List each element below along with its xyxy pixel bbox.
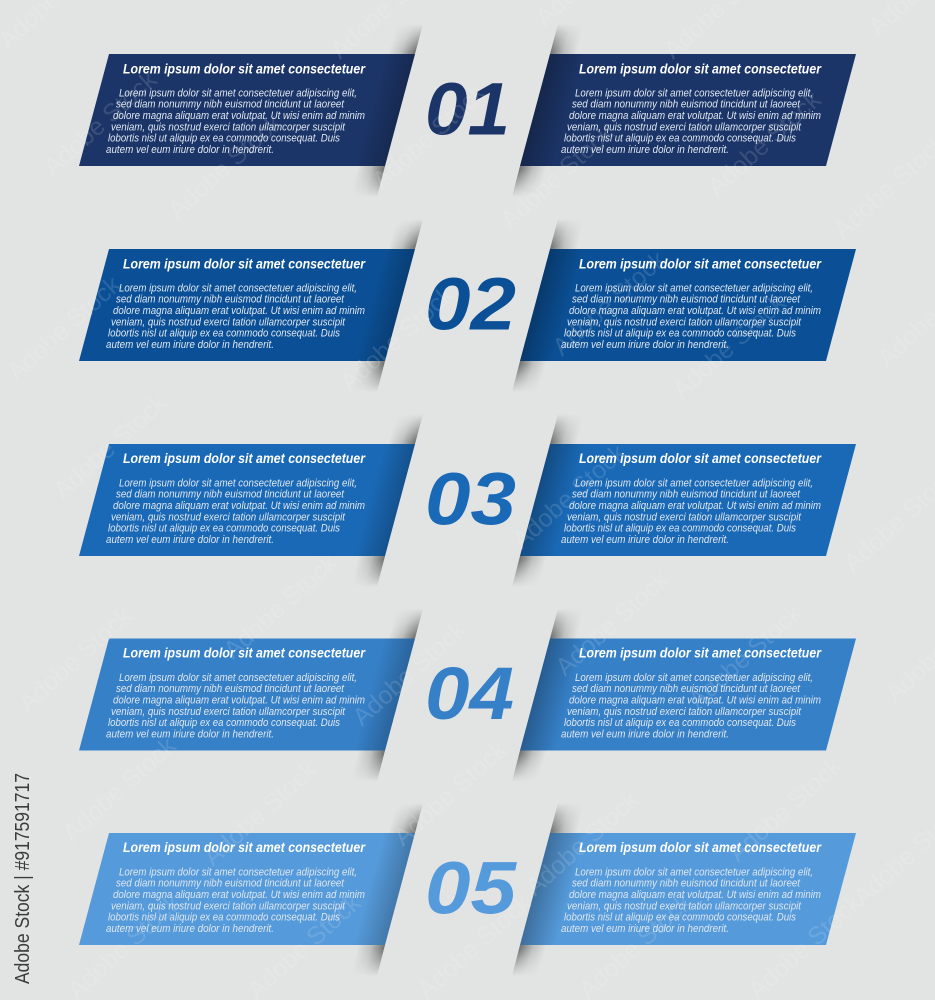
watermark layer: Adobe Stock: [163, 108, 288, 224]
right panel 04: autem vel eum iriure dolor in hendrerit.: [561, 728, 729, 740]
left panel 05: veniam, quis nostrud exerci tation ullamcorper suscipit: [111, 900, 346, 912]
right panel 02: autem vel eum iriure dolor in hendrerit.: [561, 339, 729, 351]
watermark layer: Adobe Stock: [347, 615, 472, 731]
right panel 05: Lorem ipsum dolor sit amet consectetuer adipiscing elit,: [575, 866, 813, 878]
row 04: [79, 608, 856, 782]
right panel 04: Lorem ipsum dolor sit amet consectetuer: [579, 644, 822, 660]
stock id side label: Adobe Stock | #917591717: [12, 773, 34, 984]
watermark layer: Adobe Stock: [520, 785, 645, 901]
watermark layer: Adobe Stock: [198, 755, 323, 871]
left panel 04: autem vel eum iriure dolor in hendrerit.: [106, 728, 274, 740]
left panel 03: Lorem ipsum dolor sit amet consectetuer: [123, 450, 366, 466]
right panel 03: [512, 414, 856, 587]
right panel 01: lobortis nisl ut aliquip ex ea commodo consequat. Duis: [564, 132, 796, 144]
left panel 01: Lorem ipsum dolor sit amet consectetuer adipiscing elit,: [119, 88, 357, 100]
watermark layer: Adobe Stock: [2, 270, 127, 386]
number 02: 02: [425, 262, 516, 346]
left panel 03: dolore magna aliquam erat volutpat. Ut wisi enim ad minim: [113, 500, 365, 512]
left panel 04: sed diam nonummy nibh euismod tincidunt ut laoreet: [116, 683, 345, 695]
left panel 01: Lorem ipsum dolor sit amet consectetuer: [123, 60, 366, 76]
row 02: [79, 219, 856, 392]
right panel 02: [512, 219, 856, 392]
row 01: [79, 24, 856, 197]
watermark layer: Adobe Stock: [550, 565, 675, 681]
right panel 02: veniam, quis nostrud exerci tation ullamcorper suscipit: [567, 316, 802, 328]
right panel 02: Lorem ipsum dolor sit amet consectetuer: [579, 256, 822, 272]
watermark layer: Adobe Stock: [38, 65, 163, 181]
left panel 02: lobortis nisl ut aliquip ex ea commodo consequat. Duis: [108, 328, 340, 340]
right panel 02: dolore magna aliquam erat volutpat. Ut wisi enim ad minim: [569, 305, 821, 317]
left panel 05: Lorem ipsum dolor sit amet consectetuer adipiscing elit,: [119, 866, 357, 878]
number 03: 03: [425, 458, 516, 540]
right panel 04: [512, 608, 856, 782]
left panel 04: lobortis nisl ut aliquip ex ea commodo consequat. Duis: [108, 717, 340, 729]
left panel 04: veniam, quis nostrud exerci tation ullamcorper suscipit: [111, 706, 346, 718]
left panel 03: autem vel eum iriure dolor in hendrerit.: [106, 534, 274, 546]
number 05: 05: [425, 846, 518, 930]
left panel 03: Lorem ipsum dolor sit amet consectetuer adipiscing elit,: [119, 478, 357, 490]
right panel 01: veniam, quis nostrud exerci tation ullamcorper suscipit: [567, 122, 802, 134]
right panel 05: Lorem ipsum dolor sit amet consectetuer: [579, 839, 822, 855]
left panel 04: dolore magna aliquam erat volutpat. Ut wisi enim ad minim: [113, 694, 365, 706]
right panel 04: sed diam nonummy nibh euismod tincidunt ut laoreet: [572, 683, 801, 695]
right panel 05: [512, 803, 856, 976]
watermark layer: Adobe Stock: [667, 288, 792, 404]
watermark layer: Adobe Stock: [218, 548, 343, 664]
left panel 01: lobortis nisl ut aliquip ex ea commodo consequat. Duis: [108, 132, 340, 144]
watermark layer: Adobe Stock: [13, 601, 138, 717]
left panel 02: Lorem ipsum dolor sit amet consectetuer adipiscing elit,: [119, 282, 357, 294]
watermark layer: Adobe Stock: [367, 78, 492, 194]
left panel 05: [79, 803, 423, 976]
right panel 05: lobortis nisl ut aliquip ex ea commodo consequat. Duis: [564, 912, 796, 924]
right panel 03: veniam, quis nostrud exerci tation ullamcorper suscipit: [567, 512, 802, 524]
left panel 05: sed diam nonummy nibh euismod tincidunt ut laoreet: [116, 878, 345, 890]
right panel 03: Lorem ipsum dolor sit amet consectetuer adipiscing elit,: [575, 478, 813, 490]
row 05: [79, 803, 856, 976]
left panel 04: Lorem ipsum dolor sit amet consectetuer adipiscing elit,: [119, 672, 357, 684]
watermark layer: Adobe Stock: [547, 245, 672, 361]
right panel 01: Lorem ipsum dolor sit amet consectetuer adipiscing elit,: [575, 88, 813, 100]
left panel 01: sed diam nonummy nibh euismod tincidunt ut laoreet: [116, 98, 345, 110]
left panel 04: [79, 608, 423, 782]
left panel 02: [79, 219, 423, 392]
right panel 03: Lorem ipsum dolor sit amet consectetuer: [579, 450, 822, 466]
left panel 02: sed diam nonummy nibh euismod tincidunt ut laoreet: [116, 294, 345, 306]
left panel 03: sed diam nonummy nibh euismod tincidunt ut laoreet: [116, 488, 345, 500]
left panel 01: autem vel eum iriure dolor in hendrerit.: [106, 144, 274, 156]
left panel 03: veniam, quis nostrud exerci tation ullamcorper suscipit: [111, 512, 346, 524]
left panel 01: [79, 24, 423, 197]
left panel 01: dolore magna aliquam erat volutpat. Ut wisi enim ad minim: [113, 110, 365, 122]
right panel 01: Lorem ipsum dolor sit amet consectetuer: [579, 60, 822, 76]
right panel 05: autem vel eum iriure dolor in hendrerit.: [561, 923, 729, 935]
watermark layer: Adobe Stock: [388, 735, 513, 851]
watermark layer: Adobe Stock: [723, 751, 848, 867]
left panel 02: Lorem ipsum dolor sit amet consectetuer: [123, 256, 366, 272]
left panel 05: Lorem ipsum dolor sit amet consectetuer: [123, 839, 366, 855]
left panel 05: autem vel eum iriure dolor in hendrerit.: [106, 923, 274, 935]
right panel 03: sed diam nonummy nibh euismod tincidunt ut laoreet: [572, 488, 801, 500]
number 01: 01: [425, 68, 510, 150]
left panel 03: lobortis nisl ut aliquip ex ea commodo consequat. Duis: [108, 522, 340, 534]
right panel 03: autem vel eum iriure dolor in hendrerit.: [561, 534, 729, 546]
watermark layer: Adobe Stock: [495, 118, 620, 234]
watermark layer: Adobe Stock: [702, 85, 827, 201]
right panel 04: dolore magna aliquam erat volutpat. Ut wisi enim ad minim: [569, 694, 821, 706]
left panel 01: veniam, quis nostrud exerci tation ullamcorper suscipit: [111, 122, 346, 134]
right panel 05: veniam, quis nostrud exerci tation ullamcorper suscipit: [567, 900, 802, 912]
left panel 02: autem vel eum iriure dolor in hendrerit.: [106, 339, 274, 351]
right panel 01: dolore magna aliquam erat volutpat. Ut wisi enim ad minim: [569, 110, 821, 122]
left panel 05: dolore magna aliquam erat volutpat. Ut wisi enim ad minim: [113, 889, 365, 901]
watermark layer: Adobe Stock: [57, 731, 182, 847]
number 04: 04: [425, 652, 514, 735]
right panel 02: Lorem ipsum dolor sit amet consectetuer adipiscing elit,: [575, 282, 813, 294]
right panel 02: lobortis nisl ut aliquip ex ea commodo consequat. Duis: [564, 328, 796, 340]
left panel 02: dolore magna aliquam erat volutpat. Ut wisi enim ad minim: [113, 305, 365, 317]
right panel 05: dolore magna aliquam erat volutpat. Ut wisi enim ad minim: [569, 889, 821, 901]
right panel 03: dolore magna aliquam erat volutpat. Ut wisi enim ad minim: [569, 500, 821, 512]
right panel 01: autem vel eum iriure dolor in hendrerit.: [561, 144, 729, 156]
left panel 03: [79, 414, 423, 587]
row 03: [79, 414, 856, 587]
watermark layer: Adobe Stock: [683, 598, 808, 714]
left panel 02: veniam, quis nostrud exerci tation ullamcorper suscipit: [111, 316, 346, 328]
left panel 05: lobortis nisl ut aliquip ex ea commodo consequat. Duis: [108, 912, 340, 924]
watermark layer: Adobe Stock: [48, 388, 173, 504]
watermark layer: Adobe Stock: [507, 438, 632, 554]
right panel 02: sed diam nonummy nibh euismod tincidunt ut laoreet: [572, 294, 801, 306]
right panel 04: lobortis nisl ut aliquip ex ea commodo consequat. Duis: [564, 717, 796, 729]
right panel 03: lobortis nisl ut aliquip ex ea commodo consequat. Duis: [564, 522, 796, 534]
right panel 01: sed diam nonummy nibh euismod tincidunt ut laoreet: [572, 98, 801, 110]
watermark layer: Adobe Stock: [335, 280, 460, 396]
right panel 01: [512, 24, 856, 197]
right panel 05: sed diam nonummy nibh euismod tincidunt ut laoreet: [572, 878, 801, 890]
right panel 04: Lorem ipsum dolor sit amet consectetuer adipiscing elit,: [575, 672, 813, 684]
left panel 04: Lorem ipsum dolor sit amet consectetuer: [123, 644, 366, 660]
right panel 04: veniam, quis nostrud exerci tation ullamcorper suscipit: [567, 706, 802, 718]
